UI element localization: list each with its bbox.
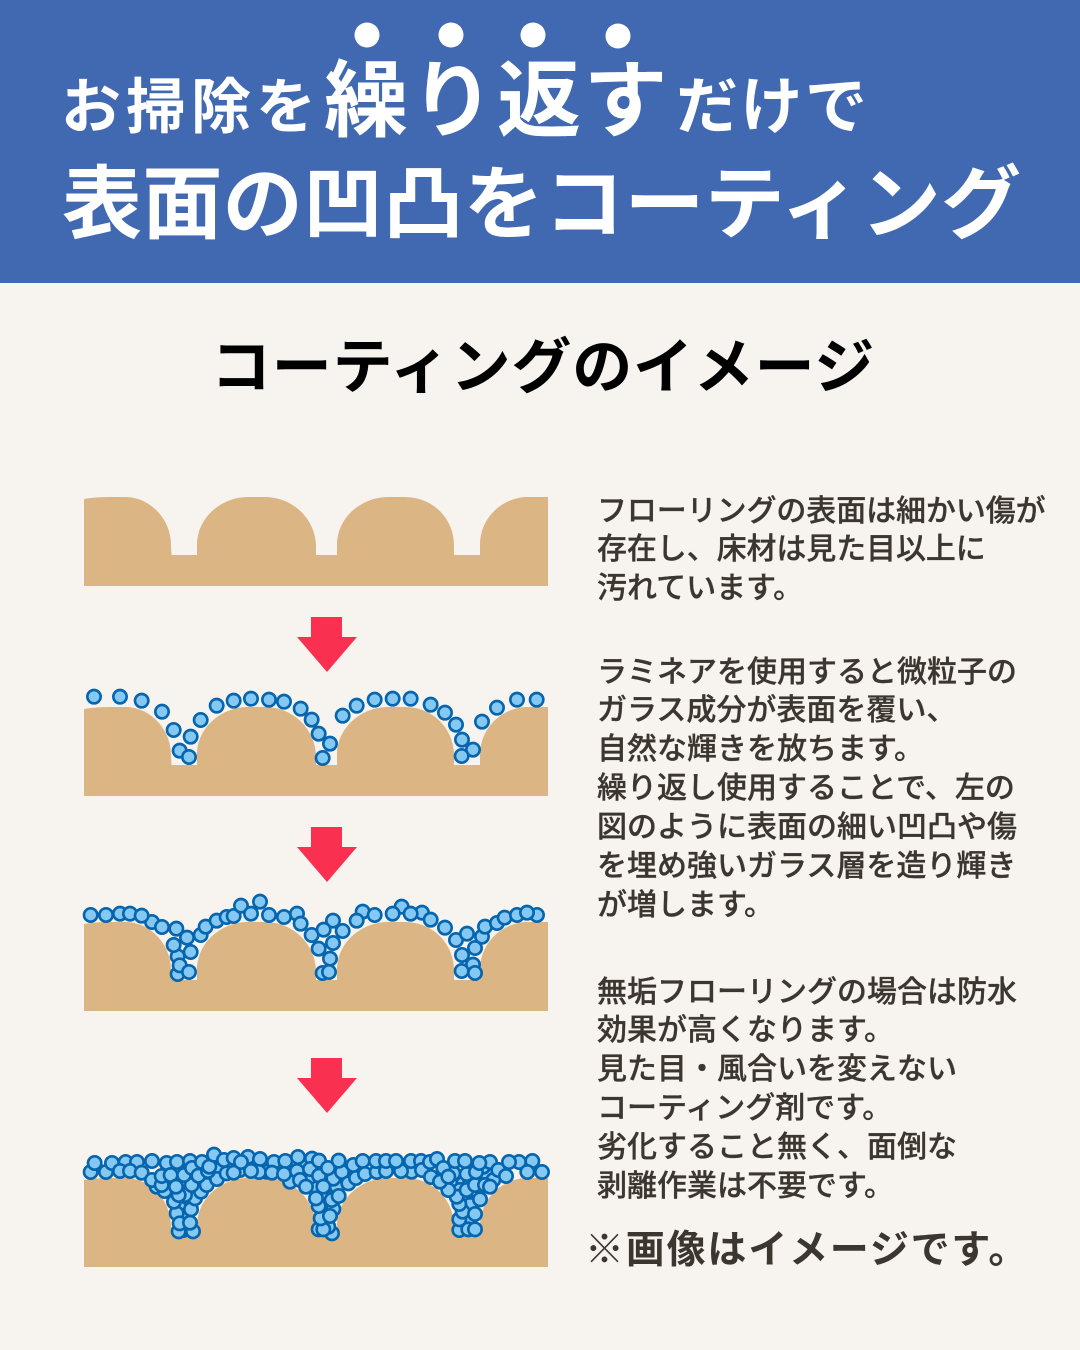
particles (84, 895, 544, 981)
text block: floor scratches: 汚れています。 (597, 572, 803, 605)
arrow 3 (297, 1058, 357, 1113)
title line 1: だけで (676, 73, 870, 142)
text block: waterproof benefit (597, 976, 1017, 1203)
diagram: bare floor surface (84, 497, 548, 586)
diagram: first coating with scattered particles (84, 690, 548, 796)
text block: laminate coating effect (597, 656, 1017, 922)
title line 2: 表面の凹凸をコーティング (62, 160, 1021, 249)
text block: waterproof benefit: 効果が高くなります。 (597, 1014, 894, 1047)
title line 1: お掃除を (61, 74, 321, 141)
text block: laminate coating effect: 図のように表面の細い凹凸や傷 (597, 811, 1017, 844)
diagram: repeated coating, denser particles (84, 895, 548, 1011)
text block: floor scratches (597, 495, 1046, 605)
text block: laminate coating effect: 繰り返し使用することで、左の (597, 772, 1015, 805)
text block: waterproof benefit: 剥離作業は不要です。 (597, 1170, 894, 1203)
text block: waterproof benefit: 無垢フローリングの場合は防水 (597, 976, 1017, 1009)
text block: floor scratches: 存在し、床材は見た目以上に (597, 533, 986, 566)
note: ※画像はイメージです。 (585, 1229, 1029, 1272)
section heading: コーティングのイメージ (211, 334, 875, 401)
arrow 1 (297, 617, 357, 672)
title line 1: 繰り返す (324, 54, 670, 148)
text block: laminate coating effect: ラミネアを使用すると微粒子の (597, 656, 1017, 689)
text block: laminate coating effect: 自然な輝きを放ちます。 (597, 733, 924, 766)
text block: waterproof benefit: 劣化すること無く、面倒な (597, 1131, 957, 1164)
arrow 2 (297, 827, 357, 882)
header banner (0, 0, 1080, 283)
diagram: fully coated surface (84, 1148, 549, 1267)
emphasis dots (354, 22, 630, 48)
text block: laminate coating effect: が増します。 (597, 889, 774, 922)
text block: laminate coating effect: ガラス成分が表面を覆い、 (597, 694, 956, 727)
particles (84, 1148, 549, 1240)
text block: floor scratches: フローリングの表面は細かい傷が (597, 495, 1046, 528)
text block: laminate coating effect: を埋め強いガラス層を造り輝き (597, 850, 1016, 883)
text block: waterproof benefit: 見た目・風合いを変えない (597, 1053, 957, 1086)
particles (87, 690, 543, 765)
text block: waterproof benefit: コーティング剤です。 (597, 1092, 892, 1125)
title line 1 (61, 54, 870, 148)
